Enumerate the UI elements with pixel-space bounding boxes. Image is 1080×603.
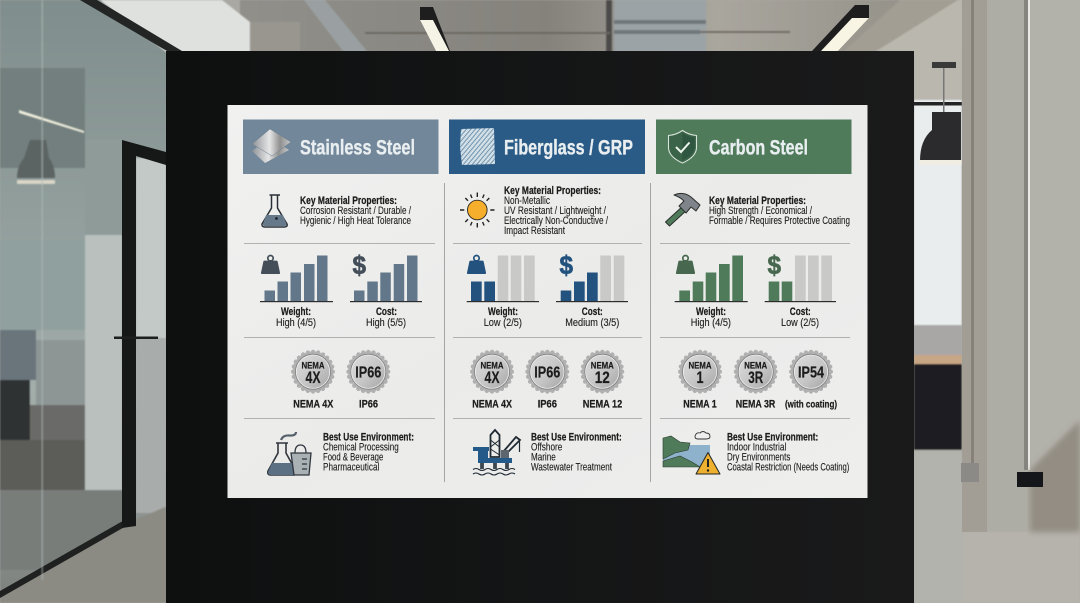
header: fiberglass <box>449 120 645 174</box>
best use text <box>727 432 849 474</box>
chart labels: Low (2/5) <box>484 317 522 329</box>
badge: NEMA 1: 1 <box>696 368 704 387</box>
key properties text: Impact Resistant <box>504 225 565 237</box>
badge labels: IP66 <box>359 398 378 410</box>
chart labels <box>276 306 406 329</box>
cost chart <box>350 250 422 302</box>
ceiling light left <box>420 7 450 51</box>
key properties text: Formable / Requires Protective Coating <box>709 215 850 227</box>
badge: NEMA 3R: NEMA <box>744 361 768 371</box>
chart labels: Cost: <box>376 306 397 318</box>
best use text: Dry Environments <box>727 452 790 464</box>
icon: flask <box>262 195 287 227</box>
best use text: Wastewater Treatment <box>531 462 612 474</box>
chart labels: Medium (3/5) <box>565 317 619 329</box>
badge: NEMA 1 <box>680 351 720 392</box>
badge: NEMA 4X <box>472 351 512 392</box>
icon: sun <box>460 192 494 228</box>
title: Stainless Steel <box>300 136 415 160</box>
back room right <box>914 50 1080 603</box>
poster <box>228 105 868 498</box>
chart labels: High (4/5) <box>276 317 316 329</box>
icon: fiber mesh <box>460 128 495 165</box>
badge labels: NEMA 3R <box>736 398 775 410</box>
key properties text: Electrically Non-Conductive / <box>504 215 608 227</box>
badge: NEMA 12 <box>582 351 623 392</box>
black display panel <box>166 51 914 603</box>
cost chart <box>765 250 836 302</box>
glass frame top <box>80 0 182 51</box>
best use text: Offshore <box>531 442 562 454</box>
chart labels: High (5/5) <box>366 317 406 329</box>
header: stainless steel <box>243 120 438 174</box>
weight chart <box>675 256 748 302</box>
best use text: Marine <box>531 452 556 464</box>
key properties text <box>300 195 411 227</box>
icon: coastal landscape with warning <box>663 432 720 474</box>
key properties text <box>709 195 850 227</box>
icon: dollar: $ <box>768 250 781 280</box>
icon: weight <box>261 256 280 274</box>
badge: NEMA 1: NEMA <box>688 361 712 371</box>
badge labels: IP66 <box>538 398 557 410</box>
badge: NEMA 4X: NEMA <box>302 361 325 371</box>
key properties text: Corrosion Resistant / Durable / <box>300 205 411 217</box>
best use text: Best Use Environment: <box>531 432 622 444</box>
best use text: Food & Beverage <box>323 452 383 464</box>
glass frame bottom <box>0 518 128 598</box>
badge: NEMA 4X: 4X <box>306 368 321 387</box>
icon: dollar: $ <box>560 250 573 280</box>
icon: weight <box>467 256 486 274</box>
best use text: Best Use Environment: <box>323 432 414 444</box>
badge: NEMA 4X: 4X <box>484 368 500 387</box>
badge labels: (with coating) <box>785 400 837 410</box>
badge labels <box>683 398 837 410</box>
concrete pillar <box>961 0 1080 532</box>
icon: dollar: $ <box>352 250 366 280</box>
icon: hammer <box>666 193 700 226</box>
best use text: Chemical Processing <box>323 442 399 454</box>
icon: offshore rig <box>473 430 520 475</box>
best use text: Coastal Restriction (Needs Coating) <box>727 462 849 474</box>
badge: IP66: IP66 <box>355 365 381 382</box>
key properties text: Key Material Properties: <box>504 185 601 197</box>
ceiling light right <box>812 5 869 51</box>
chart labels: Weight: <box>281 306 311 318</box>
icon: chemical flask and beaker <box>268 432 311 475</box>
key properties text: Key Material Properties: <box>709 195 806 207</box>
badge labels: NEMA 1 <box>683 398 717 410</box>
badge: IP66 <box>527 351 568 392</box>
panel: carbon steel <box>656 120 852 474</box>
badge labels <box>472 398 622 410</box>
badge labels: NEMA 4X <box>293 398 334 410</box>
key properties text: Key Material Properties: <box>300 195 397 207</box>
badge: NEMA 3R <box>735 351 776 392</box>
key properties text: Non-Metallic <box>504 195 551 207</box>
key properties text: Hygienic / High Heat Tolerance <box>300 215 411 227</box>
badge: NEMA 4X <box>293 351 333 392</box>
cost chart <box>556 250 628 302</box>
chart labels: Weight: <box>696 306 726 318</box>
badge: IP54 <box>791 351 831 392</box>
badge: IP66 <box>348 351 389 392</box>
badge labels: NEMA 4X <box>472 398 513 410</box>
badge labels <box>293 398 378 410</box>
chart labels: Cost: <box>790 306 811 318</box>
glass door frame <box>114 140 166 528</box>
glass wall left <box>0 0 250 603</box>
weight chart <box>467 256 539 302</box>
chart labels <box>691 306 819 329</box>
icon: weight <box>676 256 695 274</box>
key properties text: UV Resistant / Lightweight / <box>504 205 606 217</box>
reflected lamp <box>17 0 84 580</box>
weight chart <box>260 256 333 302</box>
key properties text: High Strength / Economical / <box>709 205 812 217</box>
best use text <box>531 432 622 474</box>
title: Fiberglass / GRP <box>504 136 633 160</box>
best use text <box>323 432 414 474</box>
badge: NEMA 12: NEMA <box>591 361 614 371</box>
badge: NEMA 12: 12 <box>595 368 610 387</box>
panel: stainless steel <box>243 120 438 475</box>
icon: steel plates <box>252 129 291 163</box>
best use text: Best Use Environment: <box>727 432 818 444</box>
chart labels: High (4/5) <box>691 317 731 329</box>
pendant lamp right <box>914 62 962 165</box>
badge: IP66: IP66 <box>534 365 560 382</box>
ceiling <box>240 0 965 55</box>
badge: NEMA 4X: NEMA <box>480 361 504 371</box>
panel: fiberglass <box>449 120 645 475</box>
best use text: Pharmaceutical <box>323 462 379 474</box>
chart labels <box>484 306 619 329</box>
chart labels: Weight: <box>488 306 518 318</box>
chart labels: Cost: <box>582 306 603 318</box>
icon: shield <box>668 130 696 163</box>
badge: IP54: IP54 <box>798 365 824 382</box>
badge labels: NEMA 12 <box>583 398 622 410</box>
badge: NEMA 3R: 3R <box>748 368 763 387</box>
chart labels: Low (2/5) <box>781 317 819 329</box>
key properties text <box>504 185 608 237</box>
column dividers <box>444 183 650 482</box>
header: carbon steel <box>656 120 852 174</box>
best use text: Indoor Industrial <box>727 442 786 454</box>
title: Carbon Steel <box>709 136 808 160</box>
